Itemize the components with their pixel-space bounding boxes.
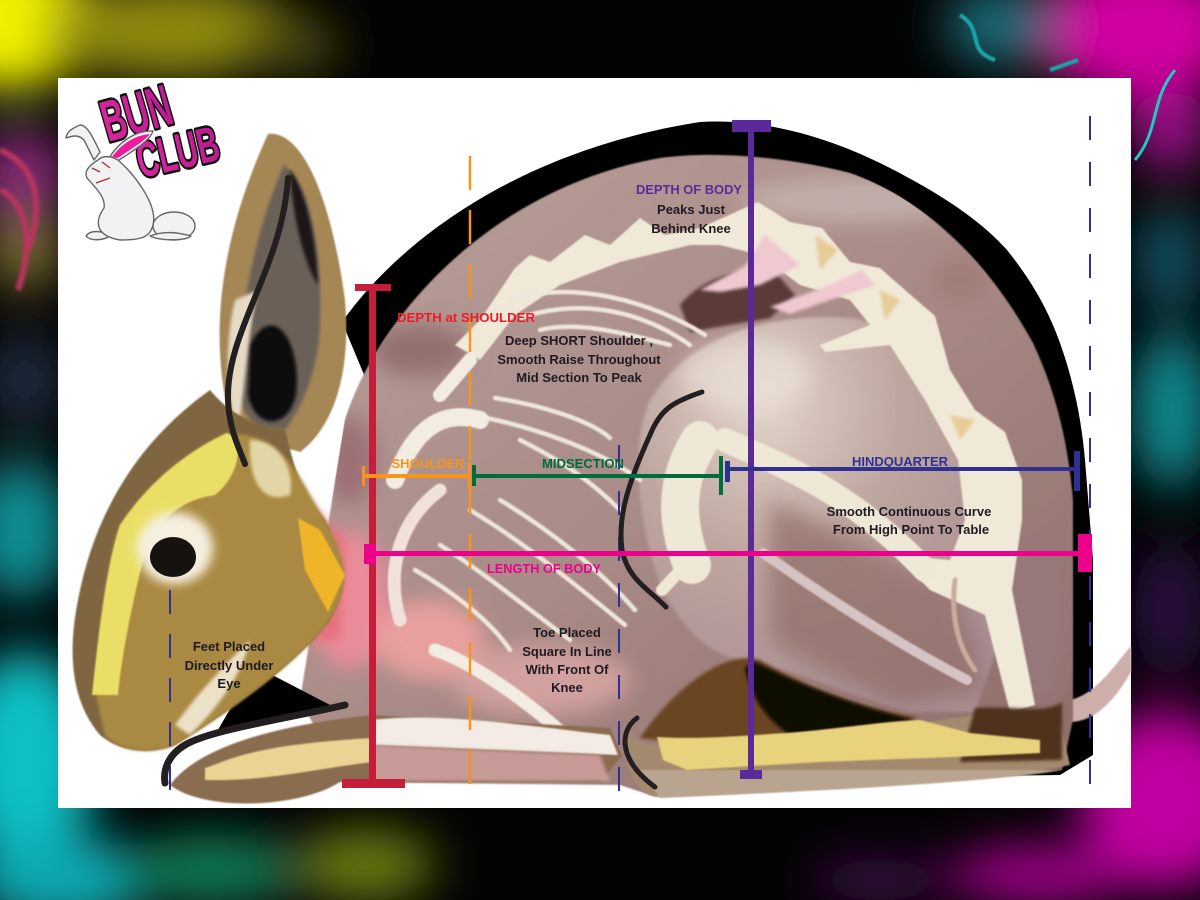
front foot bbox=[170, 715, 622, 803]
note: toe placed bbox=[522, 625, 612, 695]
label: length of body: LENGTH OF BODY bbox=[487, 561, 601, 576]
thigh highlight bbox=[680, 340, 810, 410]
note: toe placed: Toe Placed bbox=[533, 625, 601, 640]
logo inner ear bbox=[112, 134, 150, 158]
body flesh bbox=[300, 155, 1073, 795]
ribs bbox=[415, 292, 705, 650]
logo: Bun Club bbox=[66, 72, 225, 240]
logo rabbit bbox=[66, 125, 195, 240]
face fur bbox=[95, 434, 344, 751]
measure: hindquarter bbox=[725, 451, 1080, 491]
note: smooth curve: From High Point To Table bbox=[833, 522, 989, 537]
note: shoulder and mid section: Deep SHORT Shoulder , bbox=[505, 333, 653, 348]
hip and leg bones bbox=[662, 440, 975, 680]
yellow face patch bbox=[92, 433, 238, 695]
note: feet placed: Eye bbox=[217, 676, 241, 691]
muzzle highlight bbox=[175, 640, 250, 735]
label: midsection: MIDSECTION bbox=[542, 456, 624, 471]
measure: length of body bbox=[364, 534, 1092, 572]
label: depth at shoulder: DEPTH at SHOULDER bbox=[397, 310, 536, 325]
note: smooth curve: Smooth Continuous Curve bbox=[827, 504, 991, 519]
note: feet placed: Feet Placed bbox=[193, 639, 265, 654]
note: feet placed: Directly Under bbox=[185, 658, 273, 673]
logo rabbit face bbox=[92, 162, 110, 183]
hind foot bbox=[625, 715, 1070, 797]
measure: depth at shoulder bbox=[342, 284, 405, 788]
dashed guide: rear of rabbit bbox=[1089, 116, 1091, 785]
measure: shoulder bbox=[362, 462, 471, 492]
head bbox=[73, 390, 343, 751]
note: toe placed: Knee bbox=[551, 680, 583, 695]
pink cervical detail bbox=[300, 500, 345, 640]
logo wordmark: BUN bbox=[93, 72, 179, 154]
measure: depth of body bbox=[732, 120, 771, 779]
lower thigh shade bbox=[770, 500, 985, 705]
note: peaks just behind knee: Peaks Just bbox=[657, 202, 726, 217]
note: smooth curve bbox=[827, 504, 991, 537]
rabbit body illustration bbox=[73, 122, 1131, 803]
measure: midsection bbox=[472, 456, 723, 495]
contour line: hind toe bbox=[625, 718, 655, 787]
thigh bbox=[638, 317, 1000, 712]
logo wordmark bbox=[93, 72, 225, 189]
muscle shading bbox=[310, 178, 1068, 715]
note: shoulder and mid section bbox=[497, 333, 661, 385]
tan spine marks bbox=[815, 235, 975, 440]
spine and pelvis bones bbox=[455, 202, 1035, 712]
label: hindquarter: HINDQUARTER bbox=[852, 454, 949, 469]
eye bbox=[150, 537, 196, 577]
dark gap under spine bbox=[680, 266, 795, 332]
contour line: front foot bbox=[165, 705, 345, 783]
note: toe placed: With Front Of bbox=[526, 662, 609, 677]
dashed guide: front of knee bbox=[618, 445, 620, 805]
contour line: ear bbox=[228, 178, 288, 464]
note: shoulder and mid section: Mid Section To Peak bbox=[516, 370, 642, 385]
logo wordmark: CLUB bbox=[131, 116, 225, 189]
label: shoulder: SHOULDER bbox=[392, 456, 465, 471]
contour line: front of knee bbox=[621, 392, 702, 607]
note: feet placed bbox=[185, 639, 273, 691]
back outline: black curve bbox=[342, 122, 1093, 780]
note: peaks just behind knee: Behind Knee bbox=[651, 221, 731, 236]
note: peaks just behind knee bbox=[651, 202, 731, 236]
pink pelvis processes bbox=[700, 235, 875, 314]
scapula and foreleg bones bbox=[394, 360, 578, 748]
tail bbox=[1070, 646, 1131, 722]
note: toe placed: Square In Line bbox=[522, 644, 612, 659]
panel: white diagram card bbox=[58, 78, 1131, 808]
dashed guide: under eye bbox=[169, 590, 171, 802]
label: depth of body: DEPTH OF BODY bbox=[636, 182, 742, 197]
dashed guide: shoulder end bbox=[469, 156, 471, 796]
ear bbox=[220, 134, 346, 454]
note: shoulder and mid section: Smooth Raise Throughout bbox=[497, 352, 661, 367]
